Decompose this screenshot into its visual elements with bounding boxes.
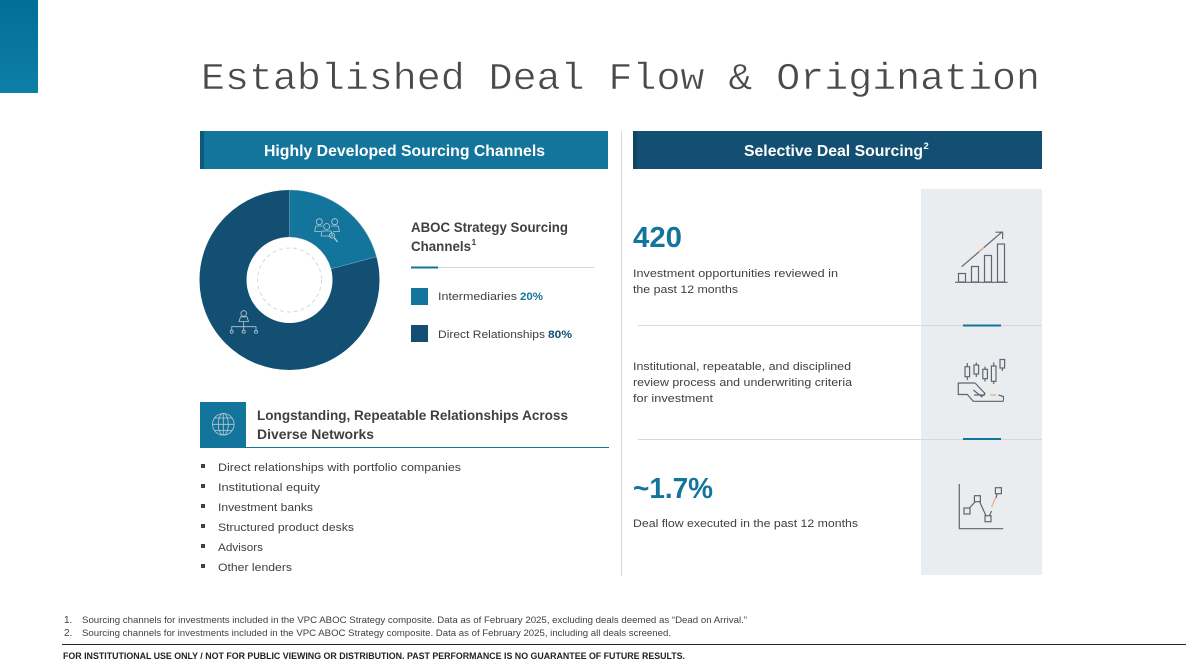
legend item: direct relationships: Direct Relationships [438, 329, 546, 341]
legend: Channels [411, 239, 471, 254]
header: selective deal sourcing: 2 [924, 141, 929, 152]
bullet list: Advisors [218, 542, 264, 554]
panel: selective deal sourcing [633, 131, 1042, 575]
bullet list: Direct relationships with portfolio companies [218, 462, 462, 474]
text: review process [633, 361, 853, 405]
stat: deal flow executed: Deal flow executed in the past 12 months [633, 518, 859, 530]
footnotes [64, 615, 747, 639]
footnotes: 1. [64, 615, 72, 626]
header: selective deal sourcing: Selective Deal Sourcing [744, 143, 923, 160]
relationships heading: Diverse Networks [257, 427, 374, 442]
bullet list: Investment banks [218, 502, 314, 514]
legend: 1 [472, 237, 476, 247]
footnotes: Sourcing channels for investments included in the VPC ABOC Strategy composite. Data as of February 2025, including all deals screened. [82, 628, 671, 638]
icon column background [921, 189, 1042, 575]
bullet list [201, 462, 462, 574]
text: review process: review process and underwriting criteria [633, 377, 853, 389]
divider two [638, 438, 1042, 440]
stat: opportunities reviewed [633, 222, 838, 296]
header: sourcing channels: Highly Developed Sourcing Channels [264, 143, 545, 160]
icon: rising bar chart [955, 232, 1008, 282]
legend item: direct relationships: 80% [548, 329, 572, 341]
icon: globe [212, 414, 234, 435]
stat: opportunities reviewed: 420 [633, 222, 682, 254]
title: Established Deal Flow & Origination [201, 58, 1040, 101]
legend item: direct relationships [411, 325, 572, 342]
corner accent block [0, 0, 38, 93]
icon: hand with candlesticks [958, 360, 1005, 401]
bullet list: Institutional equity [218, 482, 321, 494]
stat: opportunities reviewed: Investment opportunities reviewed in [633, 268, 838, 280]
bullet list: Other lenders [218, 562, 293, 574]
icon: line chart [959, 484, 1003, 529]
text: review process: Institutional, repeatable, and disciplined [633, 361, 851, 373]
legend [411, 220, 594, 342]
relationships heading: Longstanding, Repeatable Relationships Across [257, 408, 568, 423]
legend item: intermediaries: Intermediaries [438, 291, 518, 303]
legend: ABOC Strategy Sourcing [411, 220, 568, 235]
panel: highly developed sourcing channels [200, 131, 609, 574]
donut chart [223, 190, 376, 346]
stat: deal flow executed: ~1.7% [633, 473, 713, 505]
bullet list: Structured product desks [218, 522, 355, 534]
icon: network person [230, 311, 258, 333]
header: selective deal sourcing [633, 131, 1042, 169]
footnotes: 2. [64, 628, 72, 639]
icon: people search [314, 219, 340, 242]
divider one [638, 324, 1042, 326]
stat: deal flow executed [633, 473, 859, 530]
legend item: intermediaries [411, 288, 543, 305]
relationships heading [200, 402, 609, 448]
header: sourcing channels [200, 131, 608, 169]
footnotes: Sourcing channels for investments included in the VPC ABOC Strategy composite. Data as of February 2025, excluding deals deemed as “Dead on Arrival.” [82, 615, 747, 625]
legend item: intermediaries: 20% [520, 291, 543, 303]
stat: opportunities reviewed: the past 12 months [633, 284, 739, 296]
text: review process: for investment [633, 393, 713, 405]
